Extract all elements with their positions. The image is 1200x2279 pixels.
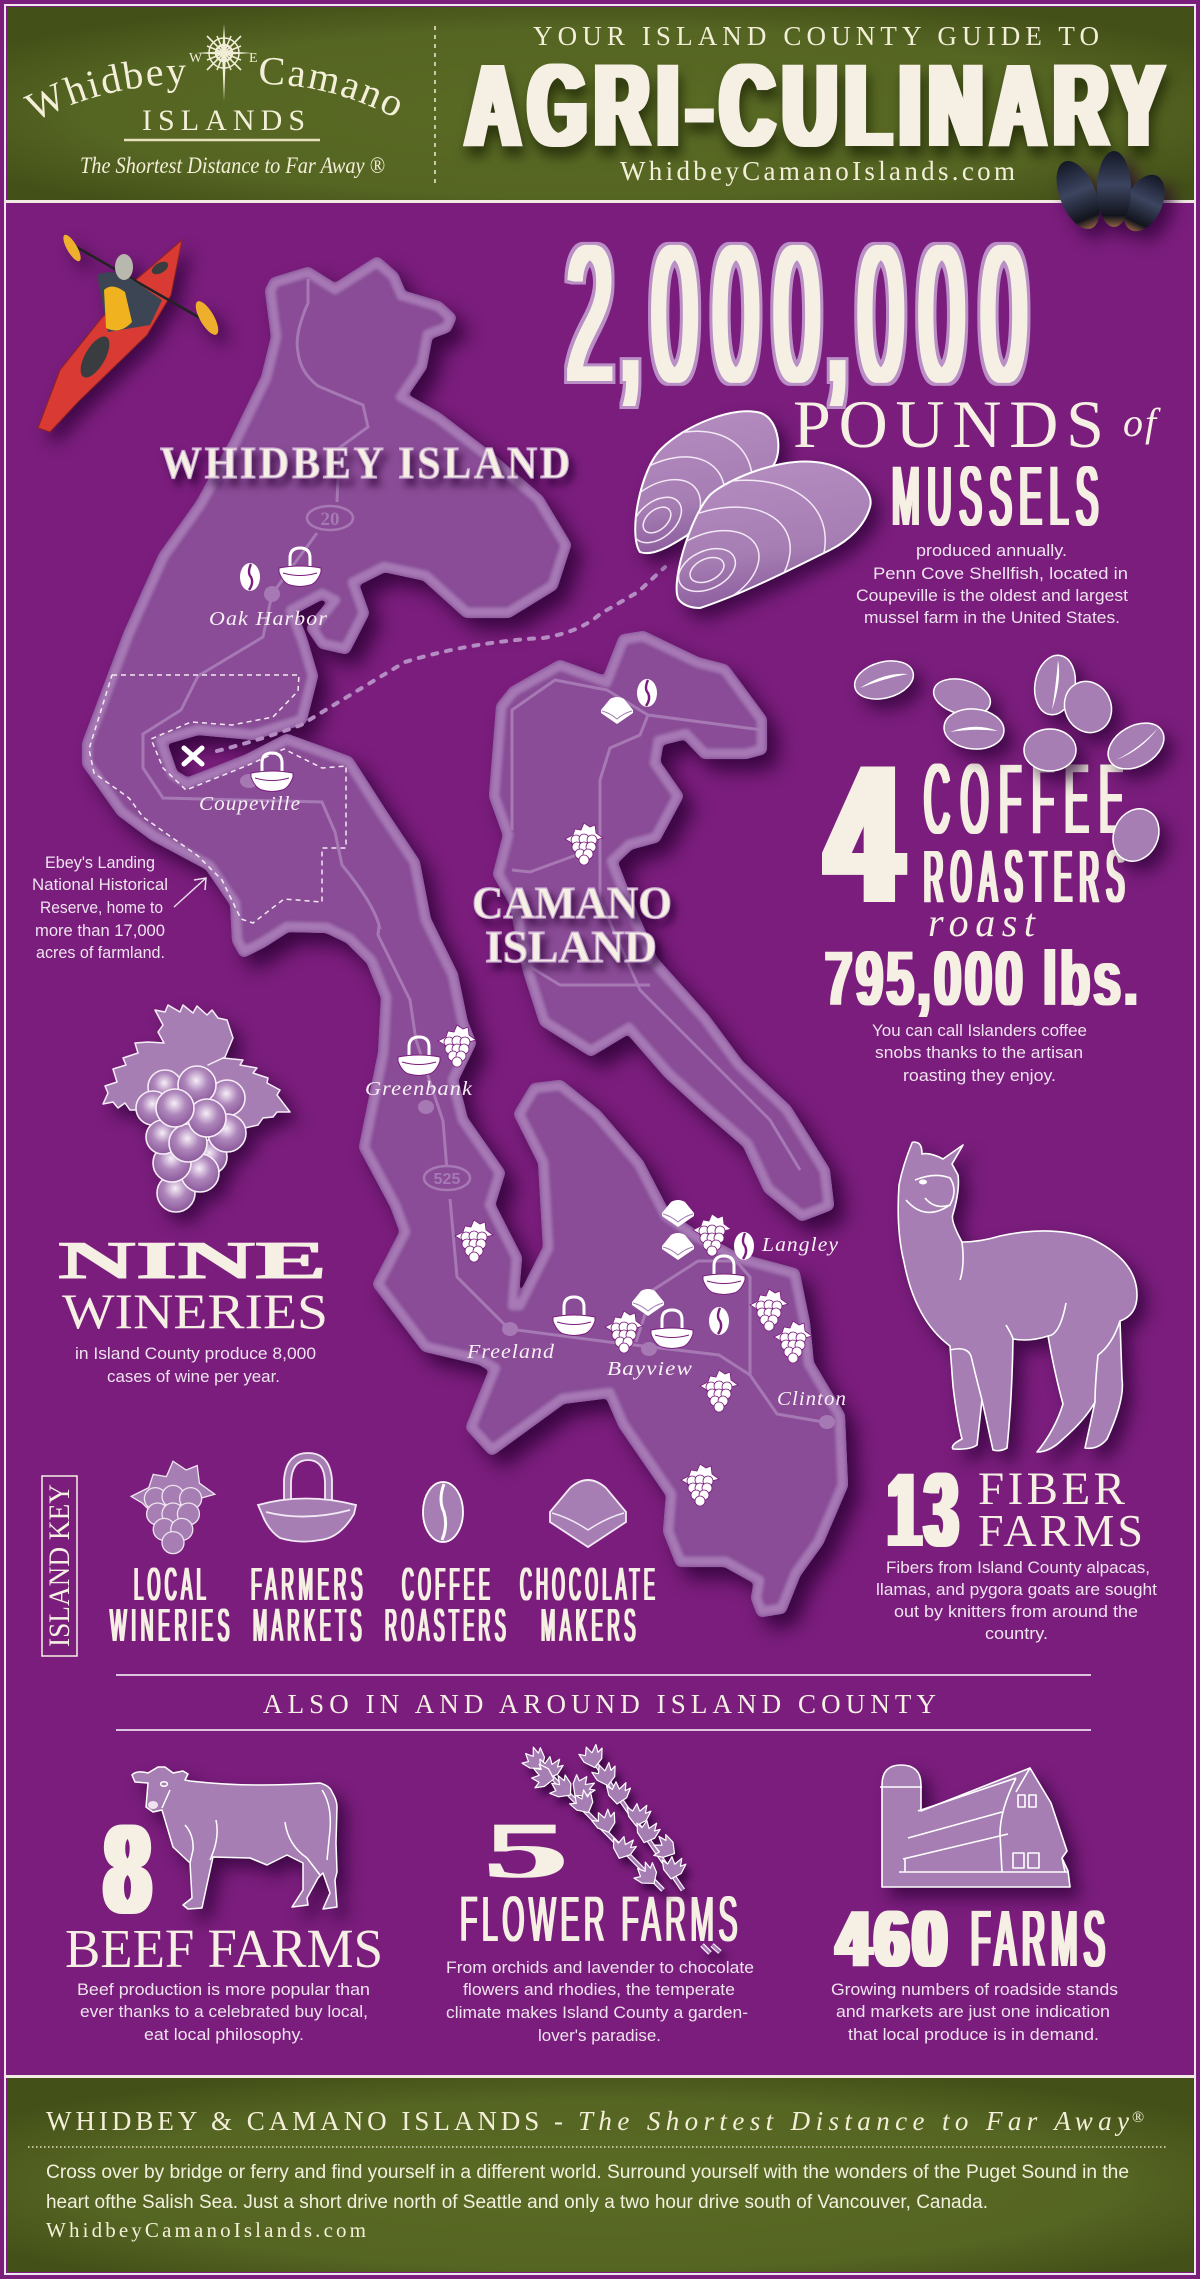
arrow: [174, 878, 206, 907]
wordmark Whidbey: Whidbey: [23, 61, 186, 118]
Langley: Langley: [761, 1234, 839, 1256]
highway badge 20: 20: [320, 509, 340, 530]
coffee description: You can call Islanders coffee: [872, 1022, 1087, 1040]
coffee description: [872, 1022, 1087, 1085]
fiber farms: FIBER: [978, 1463, 1126, 1515]
Clinton: Clinton: [777, 1388, 847, 1410]
nine: NINE: [58, 1232, 327, 1290]
highway badge 525: [424, 1166, 470, 1190]
number 4: 4: [827, 726, 901, 943]
pounds: POUNDS: [793, 386, 1104, 462]
callout text: more than 17,000: [35, 922, 165, 940]
roads: [512, 680, 800, 1170]
key label: farmers markets: [251, 1558, 367, 1651]
statistic: 8 beef farms: [65, 1767, 383, 2044]
fiber farms: [978, 1463, 1143, 1556]
number 460: 460: [837, 1894, 951, 1983]
town dots: [240, 586, 835, 1429]
icon: alpaca: [898, 1142, 1137, 1452]
key label: coffee roasters: [385, 1558, 510, 1651]
Coupeville: Coupeville: [199, 793, 301, 815]
icon: two mussel shells: [634, 410, 888, 626]
highway badge 20: [307, 506, 353, 530]
compass letters: W: [189, 51, 203, 66]
Ebey's Landing boundary: [89, 675, 346, 923]
icon: cow: [132, 1767, 337, 1909]
key icon: grapes: [131, 1461, 215, 1554]
flower description: lover's paradise.: [538, 2027, 661, 2045]
key title box: ISLAND KEY: [43, 1484, 76, 1647]
icon: X marks Penn Cove: [184, 748, 202, 764]
footer band: [6, 2075, 1194, 2272]
wordmark Islands: ISLANDS: [142, 104, 305, 137]
icon: coffee beans: [850, 652, 1172, 869]
statistic: 4 coffee roasters: [825, 652, 1172, 1085]
heading: Camano Island: ISLAND: [485, 921, 657, 972]
text: CHOCOLATE: [520, 1558, 659, 1610]
roast: roast: [928, 900, 1036, 945]
of: of: [1123, 400, 1161, 445]
key label: chocolate makers: [520, 1558, 659, 1651]
footer paragraph: Cross over by bridge or ferry and find yourself in a different world. Surround yourself with the wonders of the Puget Sound in the: [46, 2162, 1129, 2183]
flower description: flowers and rhodies, the temperate: [463, 1981, 735, 1999]
photo: three mussels: [1048, 151, 1173, 238]
coffee description: roasting they enjoy.: [903, 1067, 1056, 1085]
key icon: coffee bean: [423, 1482, 463, 1542]
fiber description: [876, 1559, 1157, 1643]
section heading: also in and around island county: ALSO IN AND AROUND ISLAND COUNTY: [263, 1689, 936, 1719]
compass letters: [189, 51, 258, 66]
statistic: 5 flower farms: [446, 1743, 754, 2045]
winery description: in Island County produce 8,000: [75, 1345, 316, 1363]
dotted route from Coupeville to mussels: [217, 567, 665, 751]
map icons: coffee roasters: [240, 563, 754, 1335]
winery description: cases of wine per year.: [107, 1368, 280, 1386]
callout: Ebey's Landing: [32, 854, 206, 962]
paddle: [73, 245, 200, 318]
footer heading: ®: [1132, 2109, 1144, 2126]
footer heading: [46, 2106, 1144, 2136]
number: 2,000,000: [567, 205, 1027, 423]
statistic: 2,000,000 pounds of mussels: [564, 242, 1161, 626]
heading: Camano Island: [472, 877, 672, 972]
island outline: [495, 637, 828, 1215]
panel: island key: MARKETS: [253, 1599, 366, 1651]
flower description: [446, 1959, 754, 2045]
logo rule: [124, 139, 320, 141]
footer paragraph: [46, 2162, 1129, 2213]
grape leaves: [103, 1005, 290, 1128]
text: MAKERS: [541, 1599, 640, 1651]
key icon: basket: [258, 1453, 356, 1542]
icon: compass rose: [196, 24, 252, 101]
key icon: chocolate: [550, 1480, 626, 1547]
map icons: farmers markets: [251, 548, 745, 1348]
Oak Harbor: Oak Harbor: [209, 608, 328, 630]
callout text: Reserve, home to: [40, 899, 163, 917]
beef description: Beef production is more popular than: [77, 1981, 370, 1999]
mussel description: [856, 542, 1128, 627]
kayak hull: [38, 240, 182, 432]
statistic: nine wineries: [58, 1005, 328, 1386]
footer paragraph: heart ofthe Salish Sea. Just a short drive north of Seattle and only a two hour drive south of Vancouver, Canada.: [46, 2192, 988, 2213]
map icons: wineries: [438, 823, 812, 1506]
beef description: eat local philosophy.: [144, 2026, 304, 2044]
number 13: 13: [888, 1452, 962, 1569]
fiber description: out by knitters from around the: [894, 1603, 1138, 1621]
wordmark Camano: Camano: [260, 58, 400, 116]
icon: barn and silo: [880, 1765, 1070, 1887]
section heading: also in and around island county: [116, 1675, 1091, 1730]
flower description: climate makes Island County a garden-: [446, 2004, 748, 2022]
icon: lavender sprigs: [519, 1743, 720, 1953]
coffee description: snobs thanks to the artisan: [875, 1044, 1083, 1062]
Freeland: Freeland: [466, 1341, 555, 1363]
fiber farms: FARMS: [978, 1505, 1143, 1556]
mussel description: Coupeville is the oldest and largest: [856, 587, 1128, 605]
Bayview: Bayview: [607, 1358, 693, 1380]
callout text: Ebey's Landing: [45, 854, 155, 872]
flower description: From orchids and lavender to chocolate: [446, 1959, 754, 1977]
number 8: 8: [105, 1799, 150, 1940]
footer website: WhidbeyCamanoIslands.com: [46, 2218, 366, 2242]
Greenbank: Greenbank: [365, 1078, 473, 1100]
beef farms: BEEF FARMS: [65, 1918, 383, 1979]
map icons: chocolate makers: [601, 697, 694, 1316]
farms description: and markets are just one indication: [836, 2003, 1110, 2021]
fiber description: country.: [985, 1625, 1048, 1643]
paddler: [97, 272, 162, 332]
island outline: [88, 263, 842, 1611]
header band: [6, 7, 1194, 203]
callout text: acres of farmland.: [36, 944, 165, 962]
map: Whidbey Island: [88, 263, 842, 1611]
key label: local wineries: [110, 1558, 234, 1651]
wineries: WINERIES: [62, 1283, 328, 1339]
statistic: 460 farms: [831, 1765, 1118, 2044]
callout text: National Historical: [32, 876, 168, 894]
text: FLOWER FARMS: [460, 1883, 742, 1955]
footer heading: The Shortest Distance to Far Away: [578, 2106, 1129, 2136]
heading: your island county guide to: YOUR ISLAND COUNTY GUIDE TO: [533, 21, 1099, 51]
farms description: that local produce is in demand.: [848, 2026, 1099, 2044]
compass letters: E: [249, 51, 258, 66]
panel: island key: FARMERS: [251, 1558, 367, 1610]
number 5: 5: [484, 1807, 568, 1895]
fiber description: Fibers from Island County alpacas,: [886, 1559, 1150, 1577]
mussel description: Penn Cove Shellfish, located in: [873, 565, 1128, 583]
beef description: [77, 1981, 370, 2044]
panel: island key: COFFEE: [402, 1558, 494, 1610]
photo: kayaker: [38, 233, 223, 432]
panel: island key: WINERIES: [110, 1599, 234, 1651]
website: WhidbeyCamanoIslands.com: [620, 156, 1015, 186]
map: Camano Island: [495, 637, 828, 1215]
panel: island key: LOCAL: [134, 1558, 210, 1610]
statistic: 13 fiber farms: [876, 1142, 1157, 1643]
panel: island key: ROASTERS: [385, 1599, 510, 1651]
mussel description: mussel farm in the United States.: [864, 609, 1120, 627]
panel: island key: [42, 1453, 659, 1656]
grapes: [136, 1066, 246, 1212]
map labels: towns: [199, 608, 847, 1410]
footer heading: WHIDBEY & CAMANO ISLANDS -: [46, 2106, 563, 2136]
logo: Whidbey Camano Islands: [23, 24, 400, 178]
fiber description: llamas, and pygora goats are sought: [876, 1581, 1157, 1599]
tagline: The Shortest Distance to Far Away ®: [80, 153, 385, 178]
callout text: [32, 854, 168, 962]
farms description: [831, 1981, 1118, 2044]
heading: Whidbey Island: WHIDBEY ISLAND: [160, 437, 573, 488]
heading: Camano Island: CAMANO: [472, 877, 672, 928]
farms description: Growing numbers of roadside stands: [831, 1981, 1118, 1999]
mussel description: produced annually.: [916, 542, 1067, 560]
highway badge 525: 525: [434, 1171, 460, 1188]
beef description: ever thanks to a celebrated buy local,: [80, 2003, 368, 2021]
roads: [143, 279, 829, 1423]
winery description: [75, 1345, 316, 1386]
icon: grape cluster: [103, 1005, 290, 1212]
